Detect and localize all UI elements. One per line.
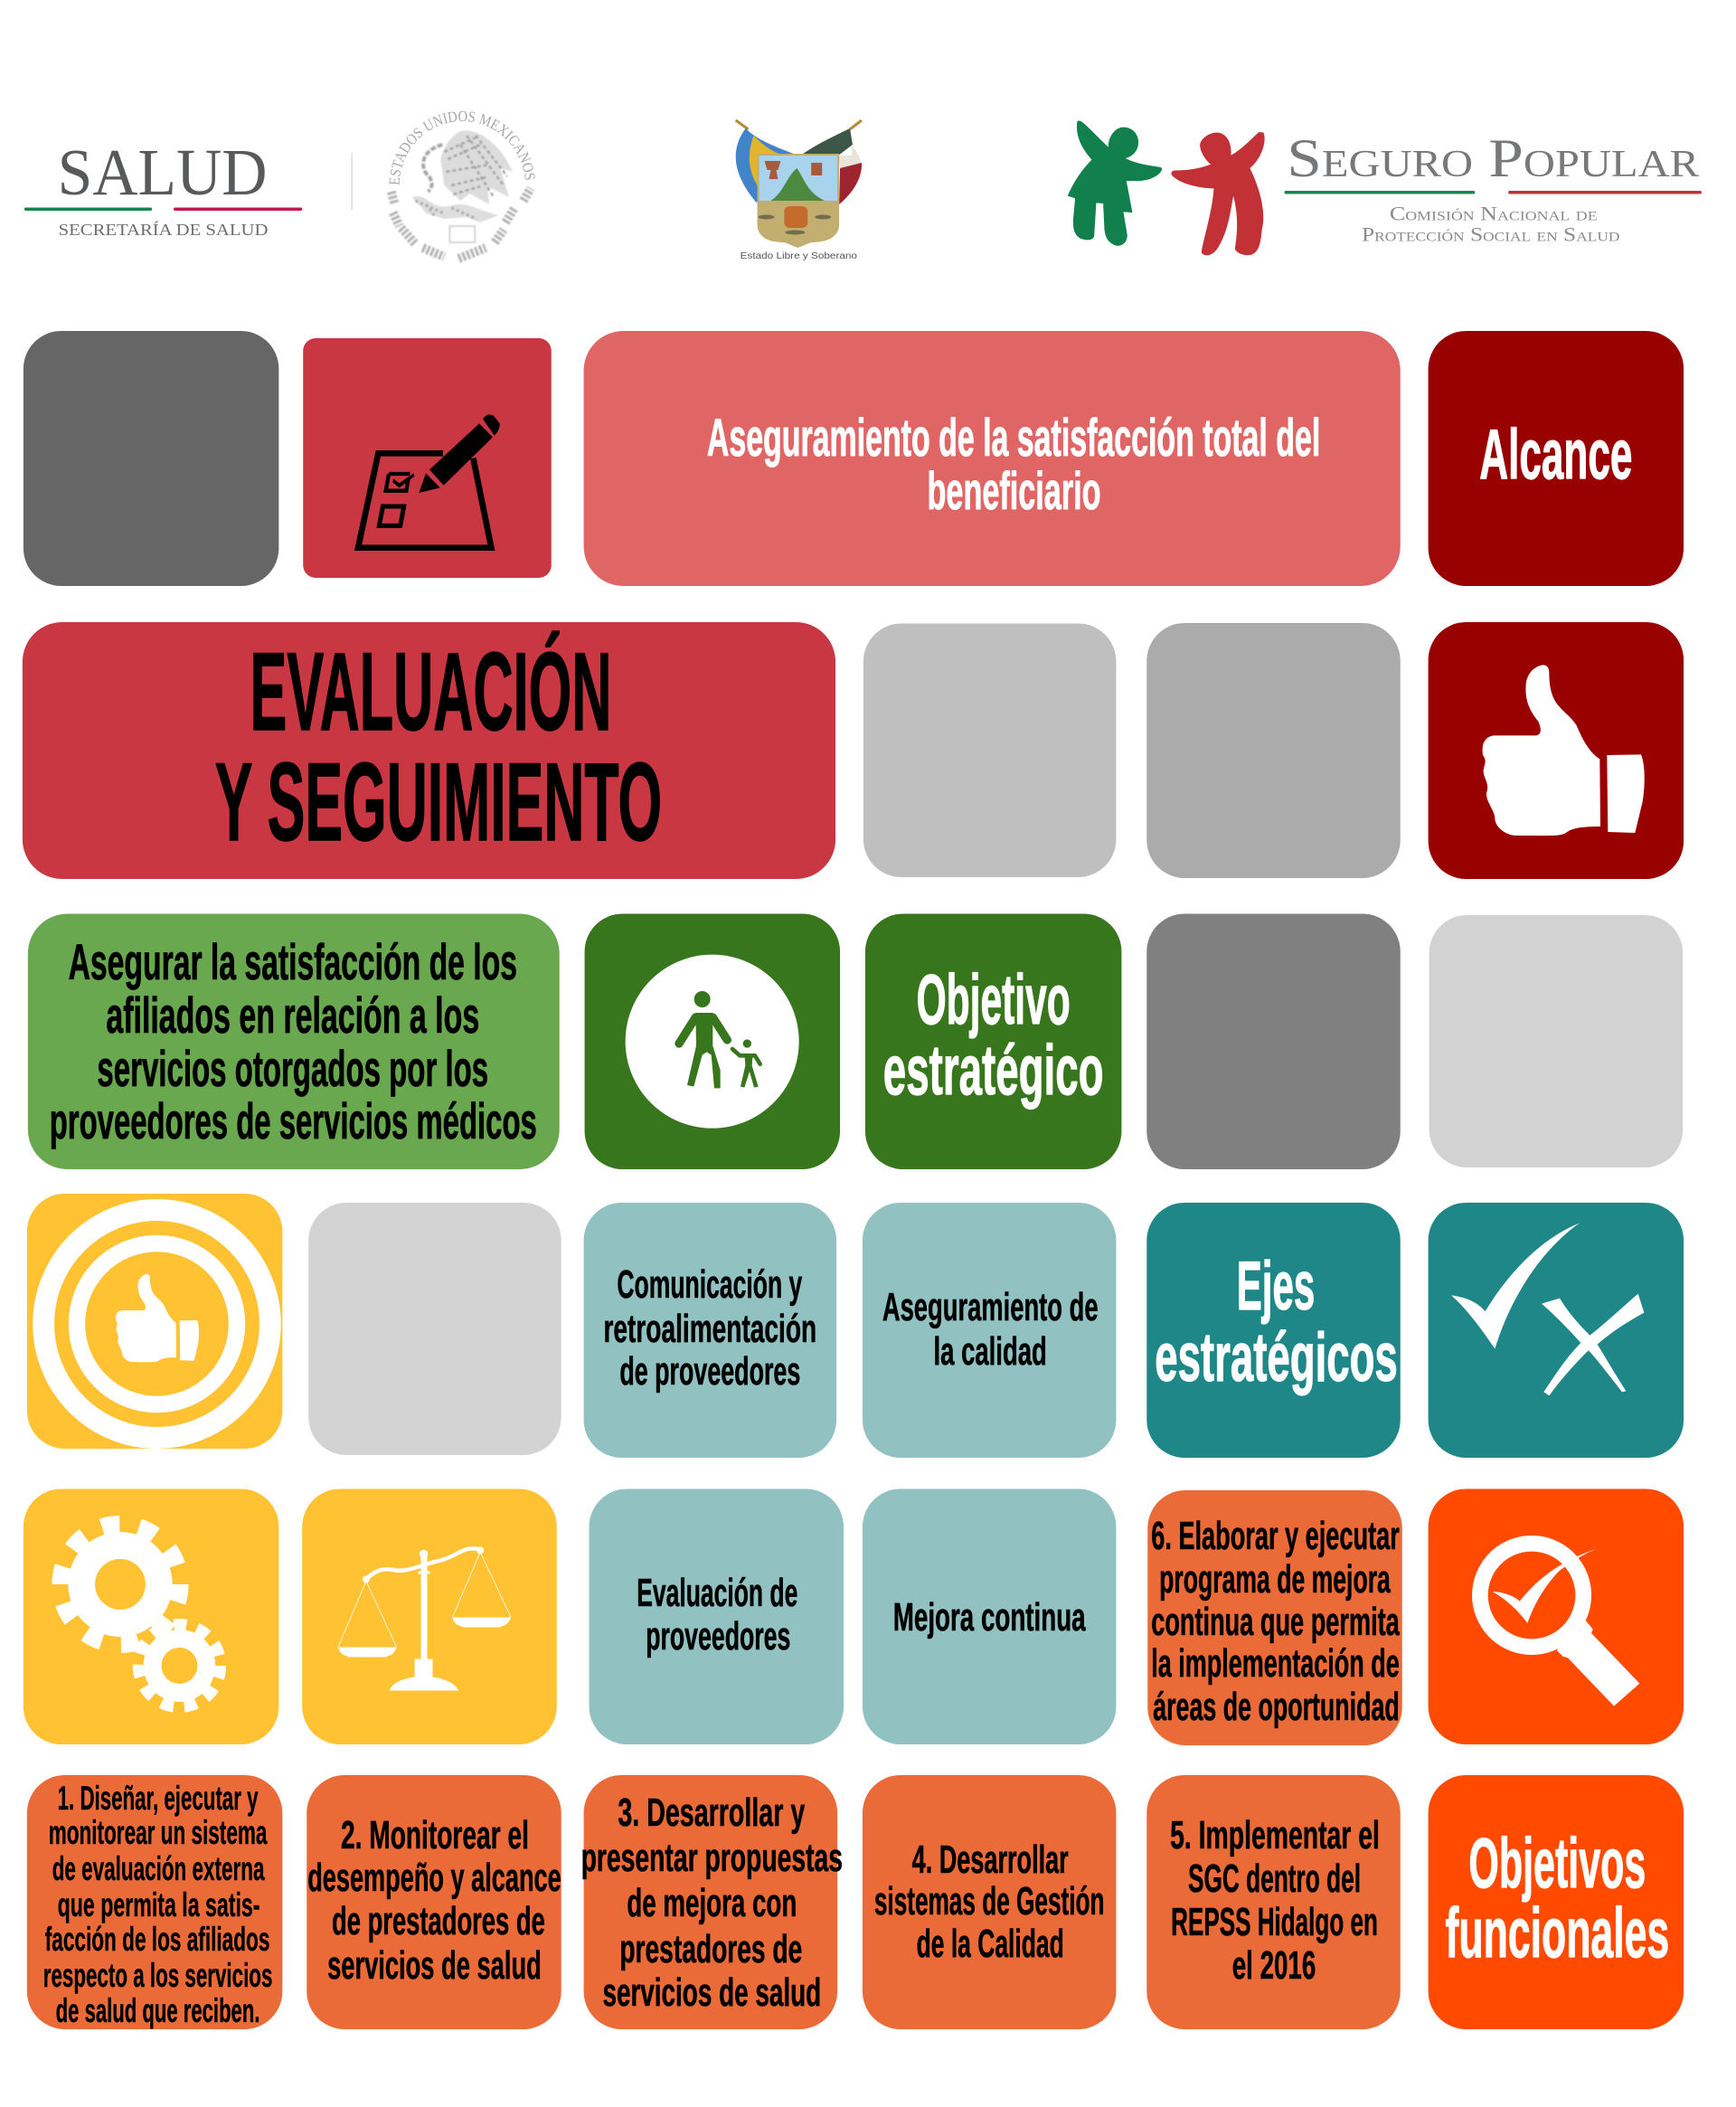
panel: functional objective 6: la implementación de — [1151, 1641, 1400, 1686]
panel: strategic objective statement: Asegurar la satisfacción de los — [69, 933, 517, 990]
panel: functional objective 1: de evaluación externa — [52, 1850, 265, 1887]
panel: functional objective 2: servicios de salud — [327, 1943, 542, 1988]
panel: axis communication: Comunicación y — [617, 1262, 803, 1307]
panel: functional objective 4: sistemas de Gestión — [874, 1879, 1105, 1923]
panel: functional objective 1 — [27, 1775, 282, 2029]
panel: Objetivo estratégico heading — [865, 913, 1121, 1169]
panel: functional objective 1: monitorear un sistema — [49, 1814, 268, 1851]
panel: functional objective 5: el 2016 — [1232, 1943, 1316, 1988]
panel: functional objective 3 — [581, 1775, 843, 2029]
icon: balance scales — [338, 1546, 511, 1691]
panel: functional objective 6 — [1147, 1490, 1402, 1745]
logo: Seguro Popular wordmark: Protección Social en Salud — [1362, 222, 1620, 246]
panel: pale gray tile — [308, 1203, 561, 1455]
logo: Hidalgo state shield — [736, 120, 862, 261]
panel: functional objective 3: prestadores de — [619, 1927, 802, 1971]
panel: axis continuous improvement — [863, 1488, 1116, 1744]
panel: gears tile — [24, 1488, 278, 1744]
panel: scope statement — [584, 331, 1401, 586]
panel: gray tile — [1146, 913, 1401, 1169]
panel: medium gray tile — [1146, 623, 1401, 878]
panel: Objetivo estratégico heading: Objetivo — [917, 961, 1071, 1039]
icon: green figure — [1068, 120, 1162, 246]
panel: axis communication: de proveedores — [619, 1349, 800, 1394]
logo: Salud — [24, 136, 353, 239]
panel: functional objective 3: servicios de salud — [602, 1970, 821, 2015]
panel: check and cross tile — [1429, 1203, 1684, 1458]
icon: gears — [61, 1525, 221, 1707]
panel: functional objective 4 — [863, 1775, 1116, 2029]
title: Evaluación y seguimiento: Y SEGUIMIENTO — [215, 740, 662, 864]
panel: scope statement: beneficiario — [928, 463, 1101, 521]
panel: checklist icon tile — [303, 338, 552, 578]
logo: national seal: ESTADOS UNIDOS MEXICANOS — [389, 110, 535, 185]
panel: axis communication: retroalimentación — [603, 1307, 816, 1351]
panel: functional objective 5: REPSS Hidalgo en — [1171, 1900, 1378, 1944]
panel: thumbs up tile — [1429, 622, 1684, 879]
logo: Seguro Popular wordmark: Comisión Nacional de — [1390, 202, 1598, 225]
panel: strategic objective statement: servicios otorgados por los — [97, 1040, 488, 1097]
icon: check and cross — [1451, 1224, 1644, 1395]
panel: axis provider evaluation — [590, 1488, 844, 1744]
logo: Salud: SALUD — [58, 136, 267, 209]
icon: thumbs up — [1483, 665, 1645, 836]
panel: functional objective 1: facción de los afiliados — [45, 1921, 269, 1958]
panel: functional objective 6: programa de mejora — [1159, 1557, 1391, 1602]
panel: axis continuous improvement: Mejora continua — [893, 1595, 1086, 1639]
icon: concentric rings — [43, 1210, 270, 1438]
panel: Ejes estratégicos heading: Ejes — [1237, 1248, 1315, 1325]
panel: axis quality assurance: la calidad — [934, 1329, 1047, 1374]
panel: functional objective 2: desempeño y alcance — [307, 1856, 561, 1900]
panel: functional objective 5: SGC dentro del — [1188, 1857, 1361, 1901]
title: Evaluación y seguimiento — [23, 622, 835, 879]
panel: functional objective 6: 6. Elaborar y ejecutar — [1151, 1514, 1400, 1558]
panel: functional objective 6: áreas de oportunidad — [1153, 1685, 1400, 1729]
panel: functional objective 5: 5. Implementar el — [1170, 1813, 1380, 1857]
panel: axis quality assurance — [863, 1203, 1116, 1458]
panel: strategic objective statement: afiliados en relación a los — [106, 987, 479, 1044]
panel: Ejes estratégicos heading: estratégicos — [1155, 1319, 1398, 1396]
panel: functional objective 4: 4. Desarrollar — [912, 1838, 1069, 1882]
panel: adult and child icon tile — [585, 913, 840, 1169]
panel: functional objective 2 — [307, 1775, 561, 2029]
panel: target thumbs up tile — [27, 1194, 282, 1449]
panel: dark gray tile — [24, 331, 278, 586]
icon: small thumbs up — [116, 1274, 199, 1362]
panel: functional objective 4: de la Calidad — [917, 1922, 1064, 1966]
panel: Alcance heading — [1429, 331, 1684, 586]
panel: Objetivo estratégico heading: estratégico — [883, 1032, 1104, 1110]
panel: magnifier tile — [1429, 1488, 1684, 1744]
panel: scope statement: Aseguramiento de la satisfacción total del — [707, 410, 1320, 468]
logo: Salud: SECRETARÍA DE SALUD — [59, 220, 268, 239]
panel: functional objective 3: de mejora con — [627, 1881, 797, 1925]
panel: functional objective 2: 2. Monitorear el — [341, 1813, 529, 1857]
panel: functional objective 3: presentar propuestas — [581, 1836, 843, 1880]
panel: light gray tile — [863, 624, 1116, 877]
panel: strategic objective statement: proveedores de servicios médicos — [50, 1092, 537, 1149]
icon: checklist and pencil — [358, 414, 500, 548]
panel: strategic objective statement — [28, 913, 560, 1169]
logo: national seal — [387, 110, 535, 263]
panel: functional objective 6: continua que permita — [1151, 1600, 1400, 1644]
icon: magnifier with check — [1480, 1544, 1639, 1706]
panel: Ejes estratégicos heading — [1146, 1203, 1401, 1458]
panel: axis quality assurance: Aseguramiento de — [882, 1285, 1099, 1329]
panel: axis communication — [584, 1203, 836, 1458]
panel: functional objective 1: respecto a los servicios — [43, 1957, 272, 1994]
panel: Objetivos funcionales heading — [1429, 1775, 1684, 2029]
panel: axis provider evaluation: proveedores — [646, 1614, 790, 1658]
panel: axis provider evaluation: Evaluación de — [637, 1571, 797, 1615]
panel: functional objective 1: 1. Diseñar, ejecutar y — [58, 1780, 259, 1817]
panel: functional objective 5 — [1146, 1775, 1401, 2029]
logo: Hidalgo state shield: Estado Libre y Soberano — [741, 251, 857, 261]
logo: Seguro Popular wordmark: Seguro Popular — [1287, 128, 1699, 188]
icon: adult and child — [626, 955, 799, 1129]
panel: scales tile — [302, 1488, 557, 1744]
panel: functional objective 1: que permita la satis- — [58, 1886, 259, 1923]
logo: Seguro Popular figures — [1068, 120, 1265, 255]
panel: pale gray tile — [1429, 915, 1683, 1167]
title: Evaluación y seguimiento: EVALUACIÓN — [250, 629, 611, 753]
logo: Seguro Popular wordmark — [1284, 128, 1702, 246]
panel: functional objective 2: de prestadores de — [332, 1899, 545, 1943]
panel: functional objective 1: de salud que reciben. — [56, 1992, 259, 2029]
panel: functional objective 3: 3. Desarrollar y — [618, 1790, 806, 1835]
